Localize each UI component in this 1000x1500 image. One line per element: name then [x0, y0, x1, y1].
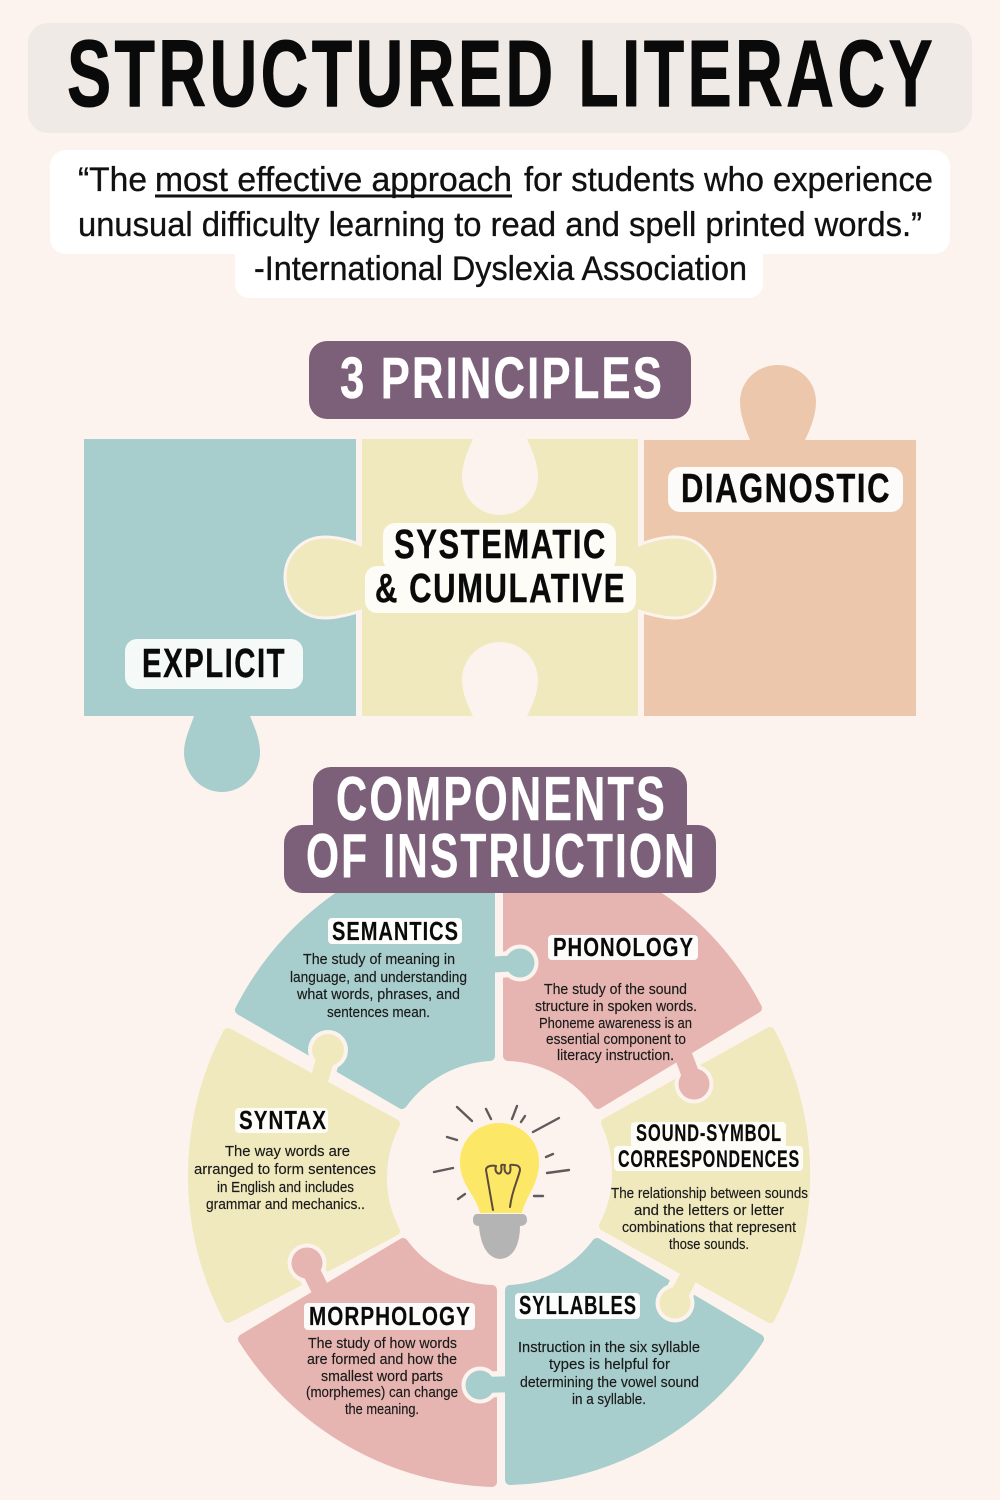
segment: phonology: structure in spoken words. — [535, 999, 697, 1015]
segment: syllables: Instruction in the six syllable — [518, 1340, 700, 1356]
segment: phonology: essential component to — [546, 1032, 686, 1048]
segment: syllables: types is helpful for — [549, 1357, 670, 1373]
segment: sound-symbol correspondences: SOUND-SYMBOL — [636, 1120, 782, 1147]
quote block: unusual difficulty learning to read and spell printed words.” — [78, 206, 922, 244]
puzzle piece: systematic and cumulative: & CUMULATIVE — [375, 565, 626, 611]
heading: components of instruction — [284, 765, 716, 893]
heading: 3 principles — [309, 341, 691, 419]
puzzle piece: explicit: EXPLICIT — [142, 640, 286, 686]
segment: syllables: SYLLABLES — [519, 1290, 637, 1320]
segment: morphology: MORPHOLOGY — [309, 1301, 471, 1331]
segment: sound-symbol correspondences: CORRESPONDENCES — [618, 1146, 800, 1173]
puzzle piece: diagnostic: DIAGNOSTIC — [681, 465, 891, 511]
puzzle piece: diagnostic — [644, 365, 916, 716]
puzzle piece: systematic and cumulative — [285, 439, 715, 716]
segment: semantics: what words, phrases, and — [296, 987, 460, 1003]
segment: morphology: The study of how words — [308, 1336, 457, 1352]
segment: morphology — [243, 1243, 492, 1482]
segment: sound-symbol correspondences: those sounds. — [669, 1237, 749, 1253]
heading: 3 principles: 3 PRINCIPLES — [340, 346, 664, 411]
icon: light bulb — [434, 1106, 569, 1259]
puzzle piece: explicit — [84, 439, 356, 792]
heading: components of instruction: COMPONENTS — [336, 765, 667, 834]
segment: morphology: (morphemes) can change — [306, 1385, 458, 1401]
segment: semantics — [240, 885, 490, 1104]
segment: morphology: the meaning. — [345, 1402, 419, 1418]
segment: phonology: The study of the sound — [544, 982, 687, 998]
puzzle piece: systematic and cumulative: SYSTEMATIC — [394, 521, 607, 567]
segment: syllables: in a syllable. — [572, 1392, 646, 1408]
segment: syllables: determining the vowel sound — [520, 1375, 699, 1391]
segment: syntax: in English and includes — [217, 1180, 354, 1196]
segment: syntax: grammar and mechanics.. — [206, 1197, 365, 1213]
quote block: “The — [78, 161, 147, 199]
segment: semantics: SEMANTICS — [332, 916, 459, 946]
segment: sound-symbol correspondences: and the letters or letter — [634, 1203, 784, 1219]
quote block — [50, 150, 950, 298]
segment: morphology: smallest word parts — [321, 1369, 443, 1385]
panel: components wheel — [193, 885, 808, 1482]
segment: semantics: The study of meaning in — [303, 952, 455, 968]
segment: syntax: SYNTAX — [239, 1105, 327, 1135]
segment: semantics: language, and understanding — [290, 970, 467, 986]
segment: syntax: The way words are — [225, 1144, 350, 1160]
segment: phonology — [508, 885, 757, 1104]
segment: sound-symbol correspondences — [604, 1032, 808, 1318]
heading: components of instruction: OF INSTRUCTION — [306, 822, 697, 891]
segment: phonology: PHONOLOGY — [553, 932, 694, 962]
quote block: -International Dyslexia Association — [254, 250, 747, 288]
panel: three principles puzzle — [84, 365, 916, 792]
segment: sound-symbol correspondences: combinations that represent — [622, 1220, 796, 1236]
segment: syntax — [193, 1033, 395, 1318]
quote block: most effective approach — [155, 161, 512, 199]
segment: syllables — [510, 1243, 759, 1480]
puzzle tabs between segments — [288, 944, 714, 1404]
quote block: for students who experience — [524, 161, 933, 199]
segment: morphology: are formed and how the — [307, 1352, 457, 1368]
segment: sound-symbol correspondences: The relationship between sounds — [611, 1186, 808, 1202]
segment: phonology: literacy instruction. — [557, 1048, 674, 1064]
segment: syntax: arranged to form sentences — [194, 1162, 376, 1178]
segment: phonology: Phoneme awareness is an — [539, 1016, 692, 1032]
segment: semantics: sentences mean. — [327, 1005, 430, 1021]
